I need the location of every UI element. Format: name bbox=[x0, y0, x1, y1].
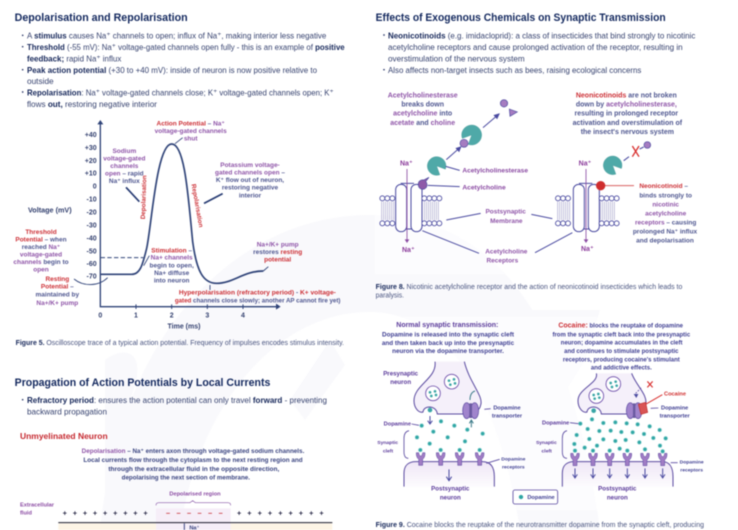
label: potassium channels bbox=[215, 162, 285, 199]
bullet list: neonicotinoids: acetylcholine receptors and cause prolonged activation of the receptor, resulting in bbox=[388, 42, 683, 52]
legend: dopamine bbox=[513, 490, 558, 504]
y axis labels: +10 bbox=[85, 171, 97, 178]
label: sodium channels: voltage-gated bbox=[103, 156, 145, 163]
y axis labels: +30 bbox=[85, 145, 97, 152]
threshold dashed line bbox=[101, 256, 143, 259]
y axis labels: -20 bbox=[87, 209, 97, 216]
caption: figure 9: Figure 9. Cocaine blocks the reuptake of the neurotransmitter dopamine from the synaptic cleft, producing bbox=[376, 520, 704, 529]
legend: dopamine: Dopamine bbox=[527, 495, 555, 501]
y axis labels: -50 bbox=[87, 248, 97, 255]
section: propagation bbox=[15, 377, 332, 530]
cocaine labels: Postsynaptic bbox=[598, 486, 637, 493]
normal receptors bbox=[416, 453, 484, 465]
icon: neonicotinoid bound bbox=[596, 181, 634, 190]
label: hyperpolarisation: gated channels close slowly; another AP cannot fire yet) bbox=[175, 297, 340, 304]
text: neonicotinoids not broken down: resulting in prolonged receptor bbox=[575, 111, 678, 118]
x axis labels: 4 bbox=[241, 312, 245, 319]
bullet list: neonicotinoids: overstimulation of the nervous system bbox=[388, 53, 525, 63]
label: potassium channels: Potassium voltage- bbox=[220, 162, 280, 169]
normal labels: Synaptic bbox=[377, 440, 398, 446]
text: acetylcholinesterase breakdown: acetylcholine into bbox=[393, 111, 452, 118]
label: resting potential bbox=[36, 276, 80, 307]
cocaine labels: neuron bbox=[607, 495, 628, 502]
y axis labels: -70 bbox=[87, 274, 97, 281]
y axis labels: -40 bbox=[87, 235, 97, 242]
label: depolarisation: Depolarisation bbox=[140, 175, 148, 219]
text: acetylcholinesterase breakdown: acetate and choline bbox=[390, 120, 455, 127]
normal labels: Postsynaptic bbox=[431, 486, 470, 493]
x axis labels: Time (ms) bbox=[168, 324, 200, 331]
label: threshold potential: voltage-gated bbox=[20, 252, 62, 259]
cocaine labels: cleft bbox=[542, 448, 552, 454]
description: depolarisation: through the extracellular fluid in the opposite direction, bbox=[108, 466, 280, 473]
neuron diagram: Extracellular bbox=[20, 502, 55, 508]
label: repolarisation: Repolarisation bbox=[190, 183, 204, 228]
label: neonicotinoid binding: prolonged Na⁺ influx bbox=[633, 229, 698, 236]
label: stimulation: Stimulation – bbox=[151, 247, 192, 254]
bullet list: depolarisation: feedback; rapid Na⁺ influx bbox=[27, 54, 122, 64]
cocaine labels: Dopamine bbox=[661, 405, 688, 411]
normal labels: neuron bbox=[390, 379, 411, 386]
label: pump: potential bbox=[264, 256, 291, 263]
cocaine postsynaptic neuron bbox=[562, 462, 673, 487]
action potential curve bbox=[101, 144, 263, 283]
bullet list: neonicotinoids: Also affects non-target insects such as bees, raising ecological concerns bbox=[388, 65, 641, 75]
normal labels: receptors bbox=[502, 465, 525, 471]
bullet list: neonicotinoids: Neonicotinoids (e.g. imidacloprid): a class of insecticides that bind strongly to nicotinic bbox=[388, 30, 695, 40]
normal labels: cleft bbox=[383, 448, 393, 454]
label: pump: restores resting bbox=[253, 249, 302, 256]
normal labels: Presynaptic bbox=[383, 371, 419, 378]
text: normal synaptic transmission bbox=[382, 322, 515, 355]
bullet list: depolarisation: flows out, restoring negative interior bbox=[27, 99, 157, 109]
label: action potential: shut bbox=[184, 135, 198, 142]
y axis labels: -10 bbox=[87, 197, 97, 204]
caption: figure 5: Figure 5. Oscilloscope trace of a typical action potential. Frequency of impulses encodes stimulus intensity. bbox=[16, 338, 344, 347]
caption: figure 8: Figure 8. Nicotinic acetylcholine receptor and the action of neonicotinoid insecticides which leads to bbox=[376, 282, 682, 291]
label: postsynaptic membrane: Membrane bbox=[490, 218, 523, 225]
y axis labels: 0 bbox=[93, 184, 97, 191]
label: resting potential: maintained by bbox=[36, 292, 80, 299]
label: action potential bbox=[155, 120, 227, 142]
text: neonicotinoids not broken down bbox=[573, 93, 683, 136]
icon: enzyme with substrate bbox=[460, 125, 482, 147]
diagram: figure 9 cocaine bbox=[376, 322, 704, 529]
label: neonicotinoid binding: binds strongly to bbox=[639, 192, 692, 199]
normal labels: Dopamine bbox=[384, 422, 411, 428]
text: normal synaptic transmission: Normal synaptic transmission: bbox=[396, 322, 498, 329]
panel backgrounds bbox=[375, 88, 706, 510]
cocaine dopamine molecules bbox=[572, 417, 668, 453]
callout arrows bbox=[74, 138, 268, 290]
bullet list: depolarisation: Peak action potential (+30 to +40 mV): inside of neuron is now positive relative to bbox=[27, 65, 317, 75]
axes bbox=[97, 120, 281, 310]
label: sodium channels: Na⁺ influx bbox=[109, 178, 140, 185]
text: cocaine: Cocaine: blocks the reuptake of dopamine bbox=[558, 322, 684, 329]
label: potassium channels: K⁺ flow out of neuron, bbox=[216, 177, 284, 184]
description: depolarisation bbox=[82, 448, 305, 482]
normal labels: Dopamine bbox=[501, 457, 526, 463]
normal labels: neuron bbox=[440, 494, 461, 501]
label: acetylcholine receptors: Acetylcholine bbox=[485, 248, 528, 255]
label: resting potential: Na+/K+ pump bbox=[36, 300, 78, 307]
label: hyperpolarisation bbox=[175, 290, 340, 304]
text: neonicotinoids not broken down: down by acetylcholinesterase, bbox=[576, 102, 677, 109]
bullet list: neonicotinoids bbox=[383, 30, 695, 75]
chart: action potential trace bbox=[13, 120, 344, 347]
bullet list: depolarisation bbox=[22, 31, 345, 109]
axis title: voltage: Voltage (mV) bbox=[28, 207, 72, 214]
normal dopamine molecules bbox=[415, 419, 485, 452]
label: threshold potential: Threshold bbox=[25, 229, 57, 236]
receptor: normal: Na⁺ bbox=[400, 160, 413, 168]
x axis labels: 0 bbox=[98, 312, 102, 319]
label: stimulation: Na+ channels bbox=[151, 255, 193, 262]
cocaine blocked reuptake bbox=[626, 381, 662, 419]
x axis labels: 3 bbox=[205, 312, 209, 319]
receptor: normal: Na⁺ bbox=[402, 246, 415, 254]
normal postsynaptic neuron bbox=[404, 462, 494, 487]
label: neonicotinoid binding: acetylcholine bbox=[645, 210, 687, 217]
text: normal synaptic transmission: Dopamine is released into the synaptic cleft bbox=[382, 332, 515, 339]
cocaine presynaptic neuron bbox=[578, 373, 646, 414]
neuron diagram: + + + + + + + + + bbox=[63, 509, 148, 518]
label: threshold potential: open bbox=[33, 267, 49, 274]
label: hyperpolarisation: Hyperpolarisation (refractory period) - K+ voltage- bbox=[179, 290, 336, 297]
text: cocaine bbox=[552, 322, 691, 371]
y axis labels bbox=[85, 132, 97, 281]
label: threshold potential: channels begin to bbox=[13, 259, 69, 266]
cocaine labels: transporter bbox=[660, 414, 691, 420]
receptor: normal bbox=[380, 160, 442, 254]
bullet: refractory period bbox=[22, 395, 327, 417]
text: cocaine: from the synaptic cleft back into the presynaptic bbox=[552, 332, 691, 338]
x axis labels: 1 bbox=[134, 312, 138, 319]
cocaine labels: Dopamine bbox=[680, 460, 704, 466]
label: postsynaptic membrane bbox=[485, 209, 526, 225]
heading: exogenous chemicals: Effects of Exogenous Chemicals on Synaptic Transmission bbox=[376, 12, 666, 24]
heading: unmyelinated neuron: Unmyelinated Neuron bbox=[20, 431, 108, 441]
description: depolarisation: depolarising the next section of membrane. bbox=[122, 475, 250, 482]
label: postsynaptic membrane: Postsynaptic bbox=[485, 209, 526, 216]
x axis labels bbox=[98, 312, 245, 331]
bullet list: depolarisation: Repolarisation: Na⁺ voltage-gated channels close; K⁺ voltage-gated channels open; K⁺ bbox=[27, 87, 334, 97]
label: action potential: voltage-gated channels bbox=[155, 128, 227, 135]
cocaine leader lines bbox=[562, 408, 678, 463]
bullet: refractory period: Refractory period: ensures the action potential can only travel forward - preventing bbox=[27, 395, 327, 405]
label: potassium channels: restoring negative bbox=[222, 185, 278, 192]
label: neonicotinoid binding: receptors – causing bbox=[635, 220, 696, 227]
background watermark bbox=[100, 215, 600, 530]
label: neonicotinoid binding: Neonicotinoid – bbox=[639, 183, 688, 190]
icon: acetylcholinesterase bbox=[427, 157, 446, 175]
label lines bbox=[422, 166, 572, 253]
text: cocaine: neuron; dopamine accumulates in the cleft bbox=[561, 341, 683, 347]
label: sodium channels bbox=[103, 148, 145, 185]
label: acetylcholine receptors bbox=[485, 248, 528, 264]
label: stimulation bbox=[150, 247, 194, 285]
heading: propagation: Propagation of Action Potentials by Local Currents bbox=[15, 377, 270, 389]
text: cocaine: receptors, producing cocaine's stimulant bbox=[563, 357, 680, 363]
y axis labels: +20 bbox=[85, 158, 97, 165]
icon: choline and acetate bbox=[500, 100, 517, 116]
normal labels: transporter bbox=[492, 414, 523, 420]
caption: figure 8: paralysis. bbox=[376, 290, 404, 299]
label: pump bbox=[253, 241, 302, 263]
y axis labels: -60 bbox=[87, 261, 97, 268]
label: neonicotinoid binding: nicotinic bbox=[652, 201, 679, 208]
arrows: breakdown bbox=[446, 114, 499, 160]
label: sodium channels: open – rapid bbox=[105, 171, 144, 178]
neuron diagram bbox=[20, 491, 332, 530]
label: sodium channels: Sodium bbox=[112, 148, 136, 155]
receptor: neonicotinoid: Na⁺ bbox=[581, 245, 594, 253]
cocaine labels bbox=[536, 391, 704, 502]
label: pump: Na+/K+ pump bbox=[257, 241, 299, 248]
label: threshold potential bbox=[13, 229, 69, 274]
icon: acetylcholine bound bbox=[418, 177, 429, 189]
description: depolarisation: Depolarisation – Na⁺ enters axon through voltage-gated sodium channels. bbox=[82, 448, 305, 455]
text: neonicotinoids not broken down: the insect's nervous system bbox=[581, 129, 674, 136]
cocaine labels: Cocaine bbox=[664, 391, 686, 397]
bullet: refractory period: backward propagation bbox=[27, 407, 107, 417]
caption: figure 8 bbox=[376, 282, 682, 299]
cocaine labels: receptors bbox=[680, 468, 703, 474]
neuron diagram: – – – – – – bbox=[166, 509, 223, 518]
normal leader lines bbox=[404, 409, 500, 463]
label: resting potential: Potential – bbox=[41, 284, 74, 291]
label: threshold potential: Potential – when bbox=[15, 236, 67, 243]
cocaine labels: Dopamine bbox=[542, 420, 569, 426]
cocaine receptors bbox=[571, 453, 667, 466]
text: normal synaptic transmission: and then taken back up into the presynaptic bbox=[382, 340, 515, 347]
text: acetylcholinesterase breakdown: breaks down bbox=[401, 102, 444, 109]
bullet list: depolarisation: outside bbox=[27, 76, 54, 86]
label: neonicotinoid binding: and depolarisation bbox=[636, 237, 694, 244]
label: potassium channels: interior bbox=[239, 192, 262, 199]
label: potassium channels: gated channels open – bbox=[215, 169, 285, 176]
label: stimulation: into neuron bbox=[154, 278, 190, 285]
neuron diagram: + + + + + + + + + bbox=[237, 509, 324, 518]
heading: depolarisation: Depolarisation and Repolarisation bbox=[15, 12, 188, 24]
text: neonicotinoids not broken down: Neonicotinoids are not broken bbox=[576, 93, 677, 100]
diagram: figure 8 neonicotinoids bbox=[376, 93, 698, 299]
text: acetylcholinesterase breakdown bbox=[388, 93, 458, 127]
label: neonicotinoid binding bbox=[633, 183, 698, 244]
y axis labels: -30 bbox=[87, 222, 97, 229]
normal labels: Dopamine bbox=[493, 405, 521, 411]
label: acetylcholine: Acetylcholine bbox=[462, 184, 506, 191]
y axis labels: +40 bbox=[85, 132, 97, 139]
receptor: neonicotinoid: Na⁺ bbox=[579, 160, 592, 168]
text: neonicotinoids not broken down: activation and overstimulation of bbox=[573, 120, 683, 127]
x axis labels: 2 bbox=[170, 312, 174, 319]
label: stimulation: Na+ diffuse bbox=[154, 270, 190, 277]
text: normal synaptic transmission: neuron via the dopamine transporter. bbox=[392, 348, 504, 355]
text: cocaine: and continues to stimulate postsynaptic bbox=[564, 349, 679, 355]
receptor: neonicotinoid bbox=[555, 160, 619, 253]
label: threshold potential: reached Na⁺ bbox=[22, 244, 60, 251]
section: exogenous chemicals bbox=[376, 12, 695, 75]
bullet list: depolarisation: A stimulus causes Na⁺ channels to open; influx of Na⁺, making interior less negative bbox=[27, 31, 327, 41]
label: sodium channels: channels bbox=[110, 163, 139, 170]
label: stimulation: begin to open, bbox=[150, 262, 194, 269]
normal labels bbox=[377, 371, 526, 501]
section: depolarisation and repolarisation bbox=[15, 12, 345, 109]
icon: enzyme blocked bbox=[603, 142, 651, 175]
text: cocaine: and addictive effects. bbox=[591, 365, 652, 371]
label: acetylcholinesterase: Acetylcholinesterase bbox=[462, 167, 528, 174]
cocaine labels: Synaptic bbox=[536, 440, 557, 446]
neuron diagram: fluid bbox=[20, 511, 32, 517]
description: depolarisation: Local currents flow through the cytoplasm to the next resting region and bbox=[83, 457, 303, 464]
neuron diagram: Depolarised region bbox=[169, 491, 221, 497]
normal dopamine transporter bbox=[463, 391, 479, 427]
label: resting potential: Resting bbox=[45, 276, 69, 283]
label: action potential: Action Potential – Na⁺ bbox=[157, 120, 225, 127]
label: acetylcholine receptors: Receptors bbox=[486, 257, 519, 264]
bullet list: depolarisation: Threshold (-55 mV): Na⁺ voltage-gated channels open fully - this is an example of positive bbox=[27, 42, 345, 52]
normal presynaptic neuron bbox=[414, 362, 481, 424]
text: acetylcholinesterase breakdown: Acetylcholinesterase bbox=[388, 93, 458, 100]
